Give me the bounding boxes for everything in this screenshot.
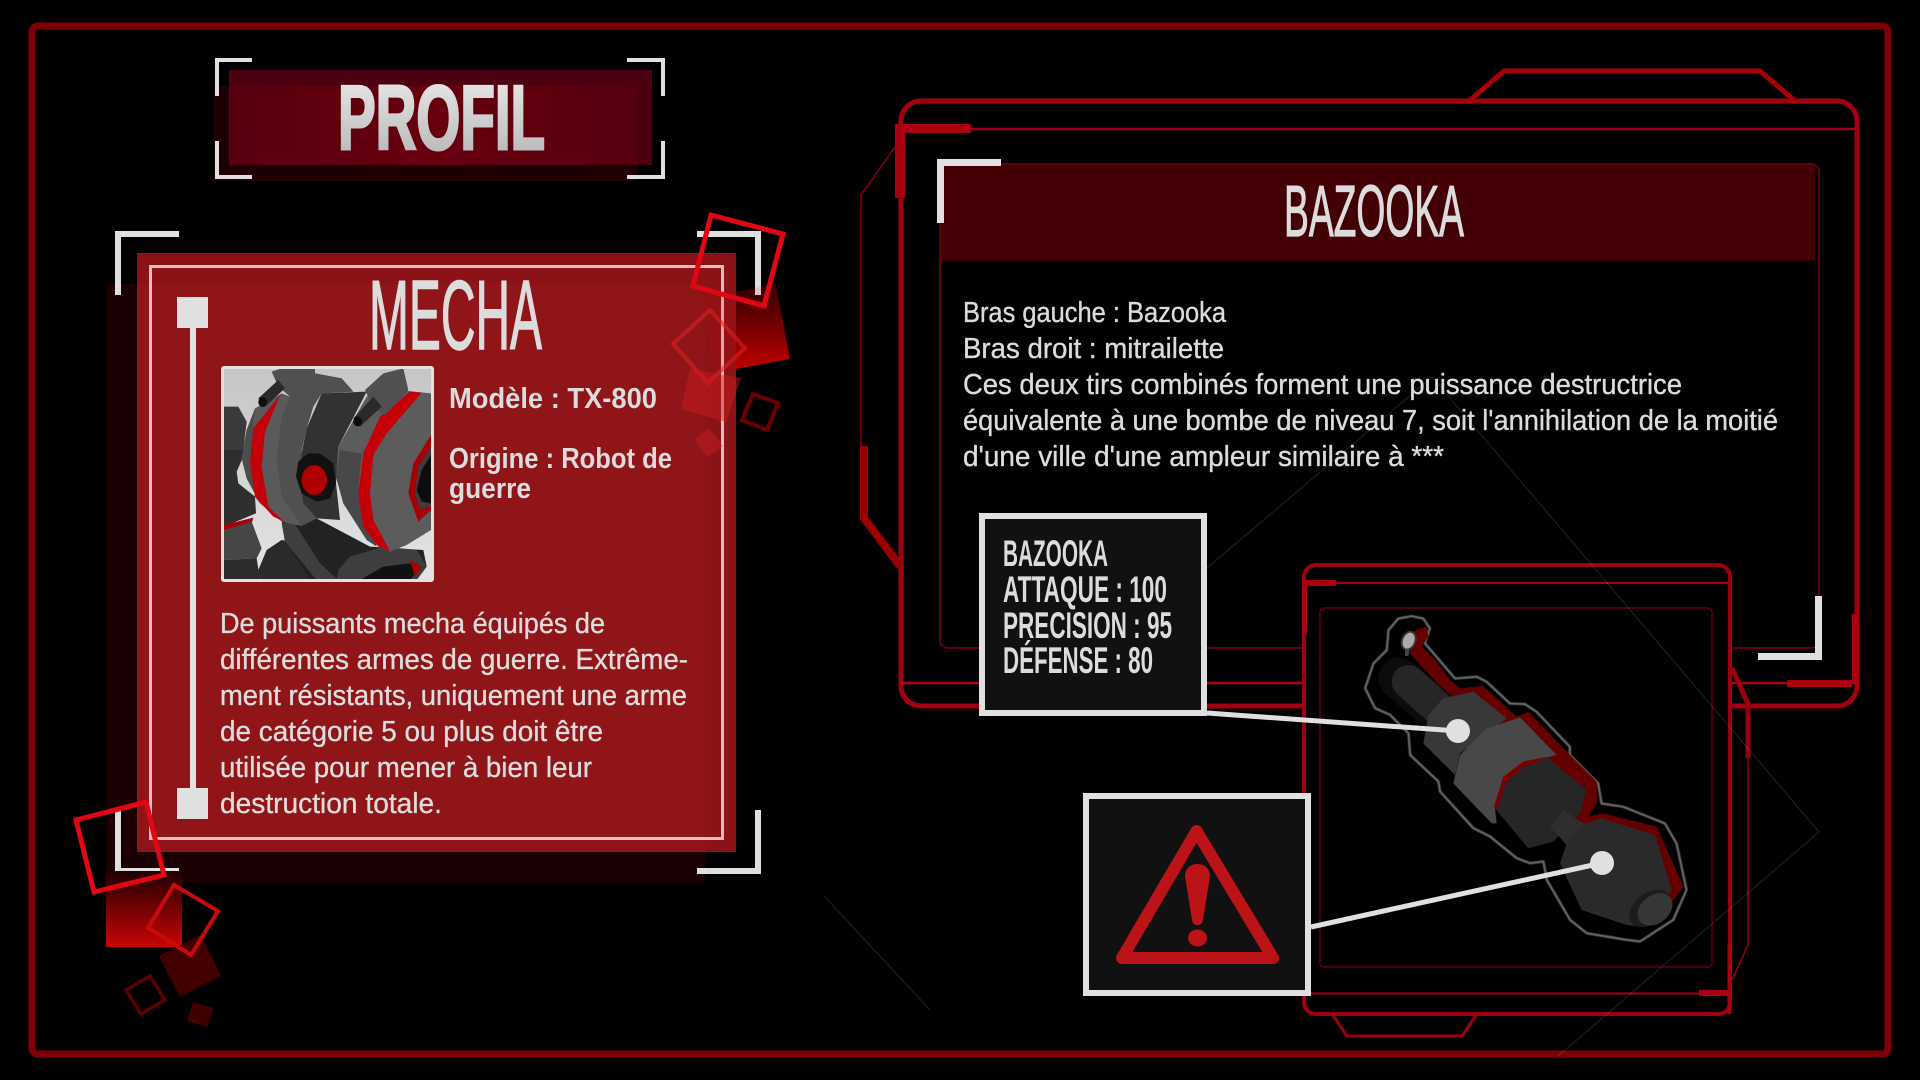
description text: Bras gauche : Bazooka [963,297,1226,329]
description bracket top left [940,162,1001,223]
card fill [137,253,736,852]
viewer right accent [1732,668,1748,980]
card inner border [150,266,722,838]
slider [177,297,208,819]
panel: mecha profile card [106,234,790,883]
mecha description: de catégorie 5 ou plus doit être [220,716,603,748]
frame left outer accent [861,147,900,566]
frame inner lines [895,124,1856,684]
card corner brackets [118,234,758,871]
description panel border [940,164,1819,648]
panel: bazooka tech frame [861,71,1857,706]
mecha illustration [221,366,434,582]
stats text [1003,533,1172,681]
title: PROFIL [214,60,663,181]
deco: bottom left squares [76,802,221,1027]
frame top tab [1470,71,1794,100]
faint diagonal background lines [824,377,1819,1057]
icon: warning triangle [1122,831,1273,958]
mecha stats text [449,383,672,505]
mecha stats text: guerre [449,473,531,505]
description bracket bottom right [1758,596,1818,656]
mecha stats text: Origine : Robot de [449,443,672,475]
mecha description: De puissants mecha équipés de [220,608,605,640]
viewer outline [1304,565,1730,1014]
weapon illustration: bazooka [1365,616,1687,942]
mecha stats text: Modèle : TX-800 [449,383,657,415]
stats text: ATTAQUE : 100 [1003,569,1167,610]
description heading: BAZOOKA [1284,172,1464,252]
stats text: DÉFENSE : 80 [1003,640,1153,681]
title shadow panel [214,86,637,181]
description text: Bras droit : mitrailette [963,333,1224,365]
stats text: PRECISION : 95 [1003,605,1172,646]
frame outline [901,101,1857,706]
title bracket frame [217,60,663,177]
mecha description: ment résistants, uniquement une arme [220,680,687,712]
description header [941,165,1815,261]
description text [963,297,1778,473]
stats box [982,516,1204,713]
mecha description: différentes armes de guerre. Extrême- [220,644,688,676]
panel: weapon viewer [1303,565,1748,1036]
mecha description [220,608,688,820]
viewer lines [1303,580,1730,1014]
callout line: warning [1311,851,1614,927]
viewer inner frame [1320,608,1712,967]
mecha description: utilisée pour mener à bien leur [220,752,592,784]
description text: Ces deux tirs combinés forment une puissance destructrice [963,369,1682,401]
callout line: stats [1207,713,1470,743]
mecha description: destruction totale. [220,788,442,820]
description text: d'une ville d'une ampleur similaire à *** [963,441,1444,473]
panel: mecha profile card: MECHA [369,260,542,370]
panel: bazooka description [940,162,1819,656]
title text: PROFIL [338,68,545,169]
deco: top right squares [673,215,790,457]
deco: gradient quad top right [702,284,790,373]
warning box [1086,796,1308,993]
card shadow [106,284,705,883]
title panel [229,70,652,165]
stats text: BAZOOKA [1003,533,1108,574]
viewer bottom tab [1332,1014,1477,1036]
description text: équivalente à une bombe de niveau 7, soit l'annihilation de la moitié [963,405,1778,437]
